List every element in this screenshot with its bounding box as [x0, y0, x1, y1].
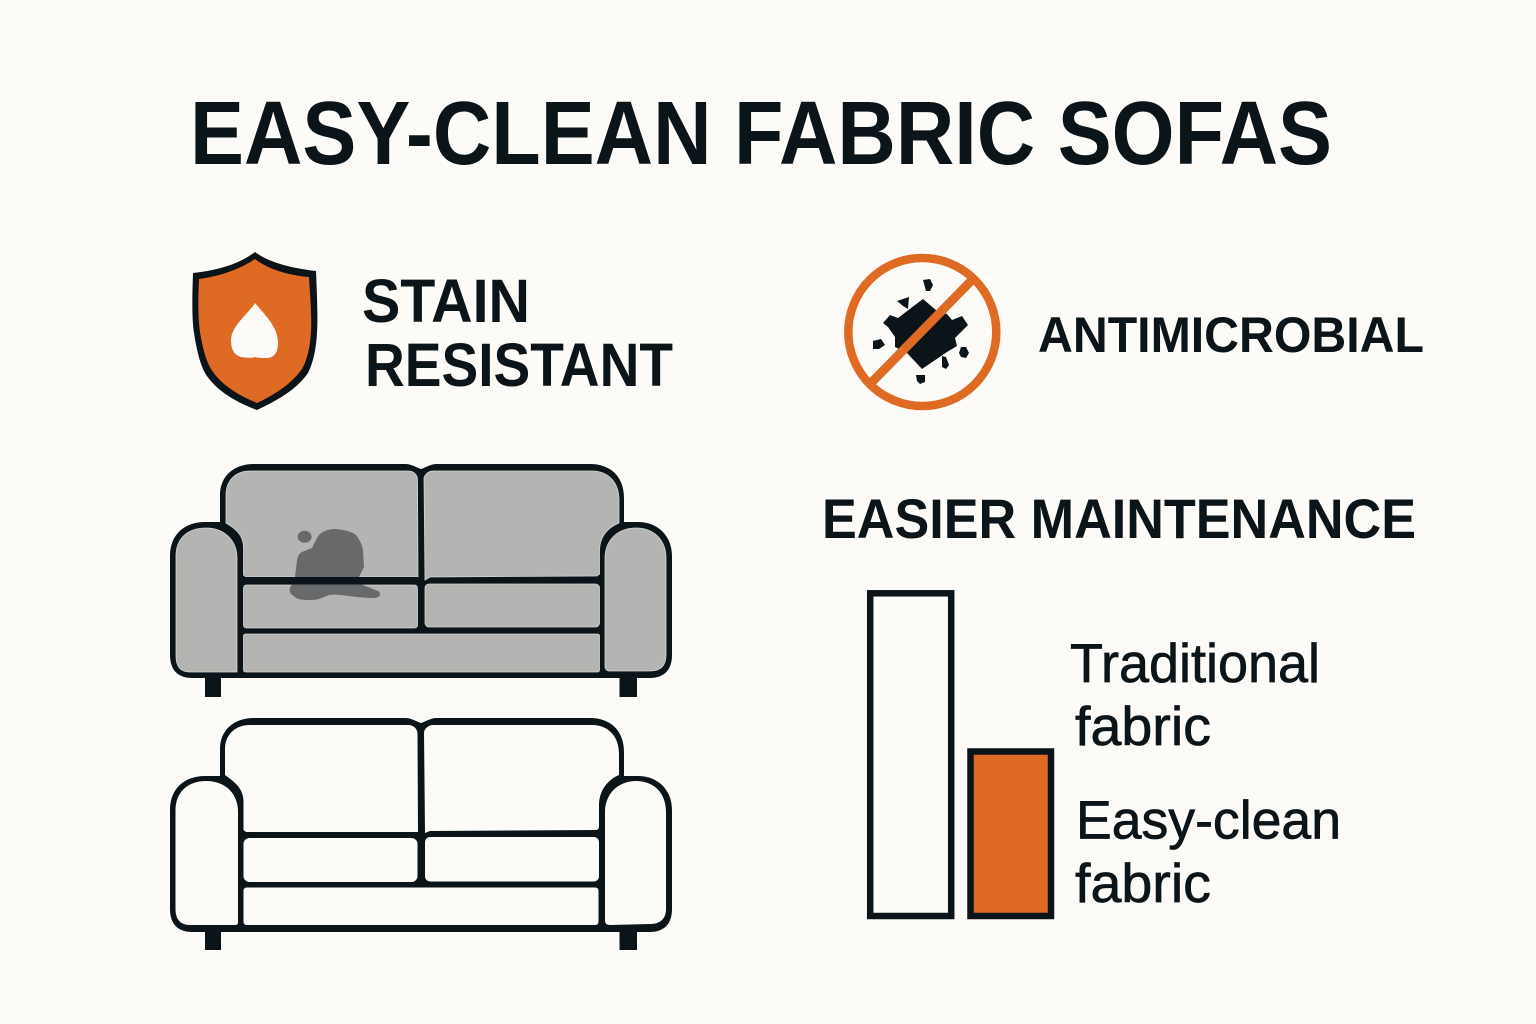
- arms: [176, 781, 666, 925]
- seat cushions and base: [244, 837, 599, 925]
- title: EASY-CLEAN FABRIC SOFAS: [190, 84, 1332, 184]
- bar chart: [870, 593, 1051, 916]
- sofa: stained grey: [170, 464, 672, 697]
- label: stain resistant: RESISTANT: [365, 331, 673, 399]
- cushion divider: [244, 577, 418, 584]
- label: stain resistant: STAIN: [362, 267, 530, 335]
- label: antimicrobial: ANTIMICROBIAL: [1038, 307, 1424, 363]
- label: traditional fabric: [1070, 632, 1320, 757]
- heading: easier maintenance: EASIER MAINTENANCE: [822, 487, 1416, 550]
- back cushions: [226, 471, 619, 580]
- back cushions: [225, 725, 619, 833]
- label: easy-clean fabric: fabric: [1075, 852, 1211, 914]
- seat cushions and base: [244, 584, 600, 672]
- label: traditional fabric: fabric: [1075, 695, 1211, 757]
- icon: shield with drop: [192, 252, 317, 410]
- sofa: clean white: [170, 718, 672, 950]
- bar: easy-clean fabric: [970, 752, 1051, 916]
- arms: [176, 528, 666, 672]
- label: traditional fabric: Traditional: [1070, 632, 1320, 694]
- label: stain resistant: [362, 267, 673, 399]
- stain: [290, 529, 380, 600]
- icon: antimicrobial prohibition: [848, 258, 996, 406]
- sofa outline: [170, 718, 672, 950]
- bar: traditional fabric: [870, 593, 951, 916]
- sofa outline: [170, 464, 672, 697]
- label: easy-clean fabric: [1075, 790, 1341, 914]
- label: easy-clean fabric: Easy-clean: [1076, 790, 1341, 850]
